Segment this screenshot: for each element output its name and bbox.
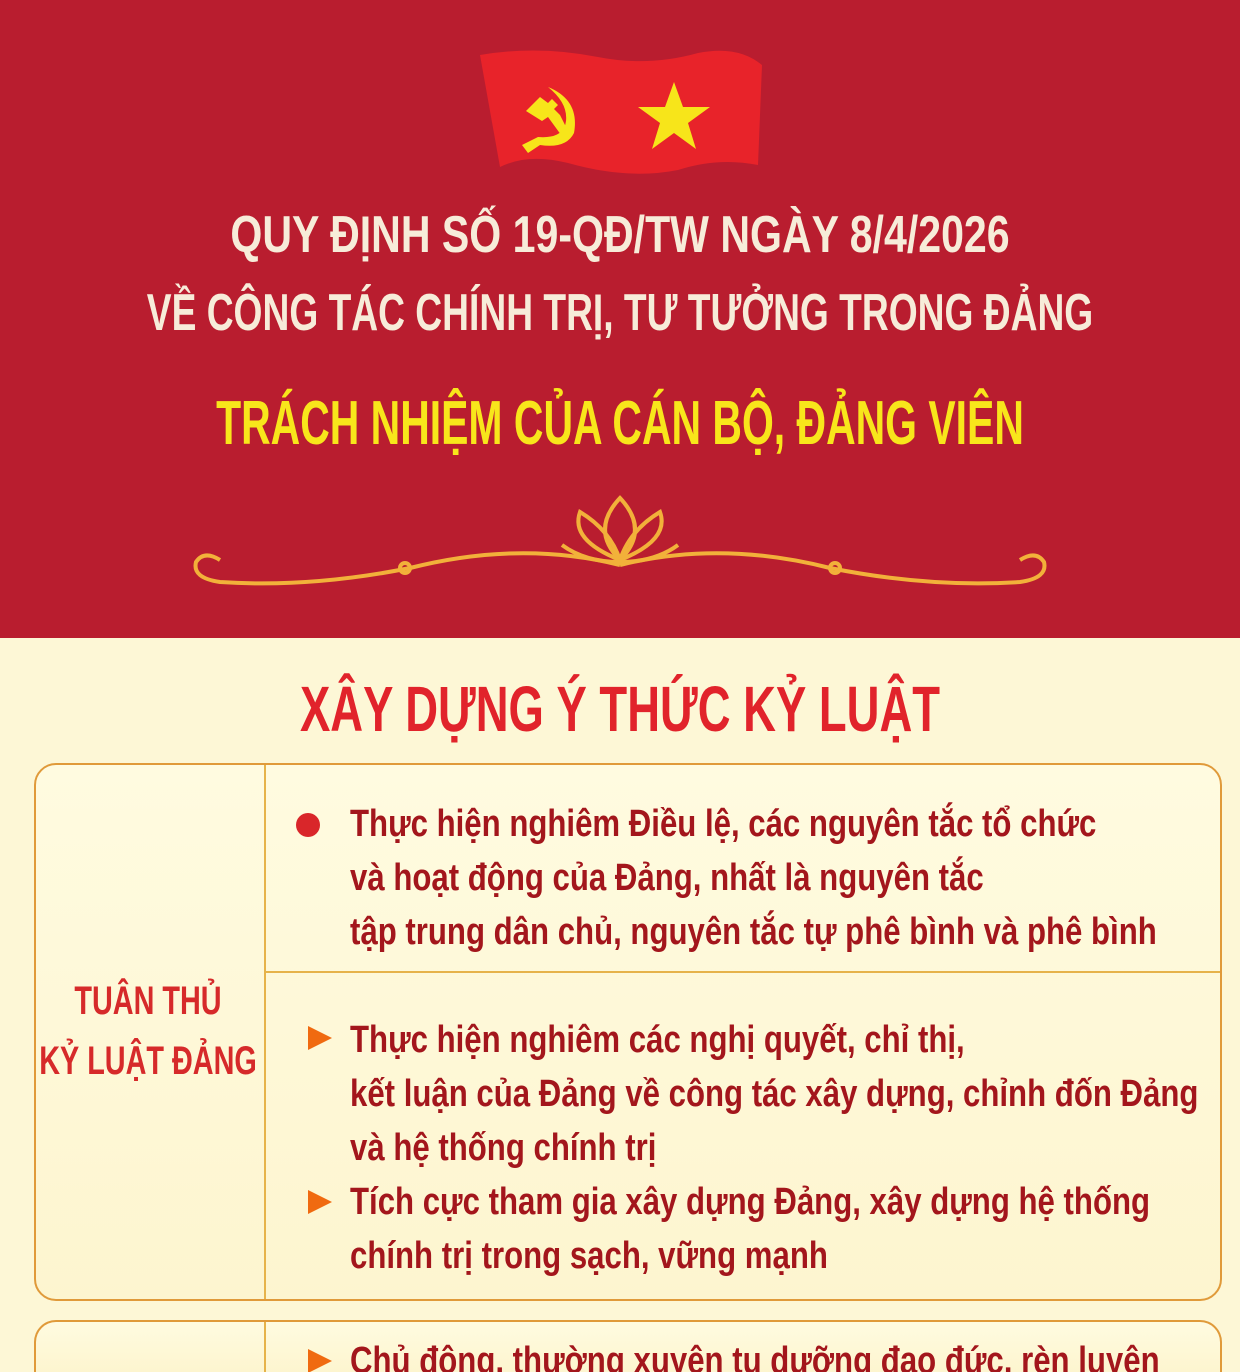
bullet item 3: chính trị trong sạch, vững mạnh <box>350 1235 828 1277</box>
title line 2: VỀ CÔNG TÁC CHÍNH TRỊ, TƯ TƯỞNG TRONG ĐẢNG <box>147 284 1093 342</box>
bullet item 2: và hệ thống chính trị <box>350 1127 656 1169</box>
bullet item 2 <box>308 1019 1198 1169</box>
bullet item 1: Thực hiện nghiêm Điều lệ, các nguyên tắc tổ chức <box>350 803 1096 845</box>
panel: tuân thủ kỷ luật Đảng <box>34 763 1222 1301</box>
bullet item 3: Tích cực tham gia xây dựng Đảng, xây dựng hệ thống <box>350 1181 1150 1223</box>
bullet item 1 <box>296 802 1157 953</box>
bullet item 2: Thực hiện nghiêm các nghị quyết, chỉ thị, <box>350 1019 965 1061</box>
ornament <box>194 495 1046 586</box>
label: TUÂN THỦ KỶ LUẬT ĐẢNG: TUÂN THỦ <box>74 979 222 1023</box>
section heading: XÂY DỰNG Ý THỨC KỶ LUẬT <box>300 673 940 745</box>
bullet item 2: kết luận của Đảng về công tác xây dựng, chỉnh đốn Đảng <box>350 1073 1198 1115</box>
title line 1: QUY ĐỊNH SỐ 19-QĐ/TW NGÀY 8/4/2026 <box>230 206 1010 264</box>
label: TUÂN THỦ KỶ LUẬT ĐẢNG: KỶ LUẬT ĐẢNG <box>39 1039 257 1083</box>
subtitle: TRÁCH NHIỆM CỦA CÁN BỘ, ĐẢNG VIÊN <box>216 389 1024 458</box>
panel: second section <box>34 1320 1222 1372</box>
icon: flag <box>480 50 762 174</box>
bullet item 1: tập trung dân chủ, nguyên tắc tự phê bình và phê bình <box>350 911 1157 953</box>
label: TUÂN THỦ KỶ LUẬT ĐẢNG <box>39 978 257 1083</box>
bullet item 1: và hoạt động của Đảng, nhất là nguyên tắc <box>350 857 984 899</box>
header background <box>0 0 1240 638</box>
bullet item 3 <box>308 1181 1150 1277</box>
